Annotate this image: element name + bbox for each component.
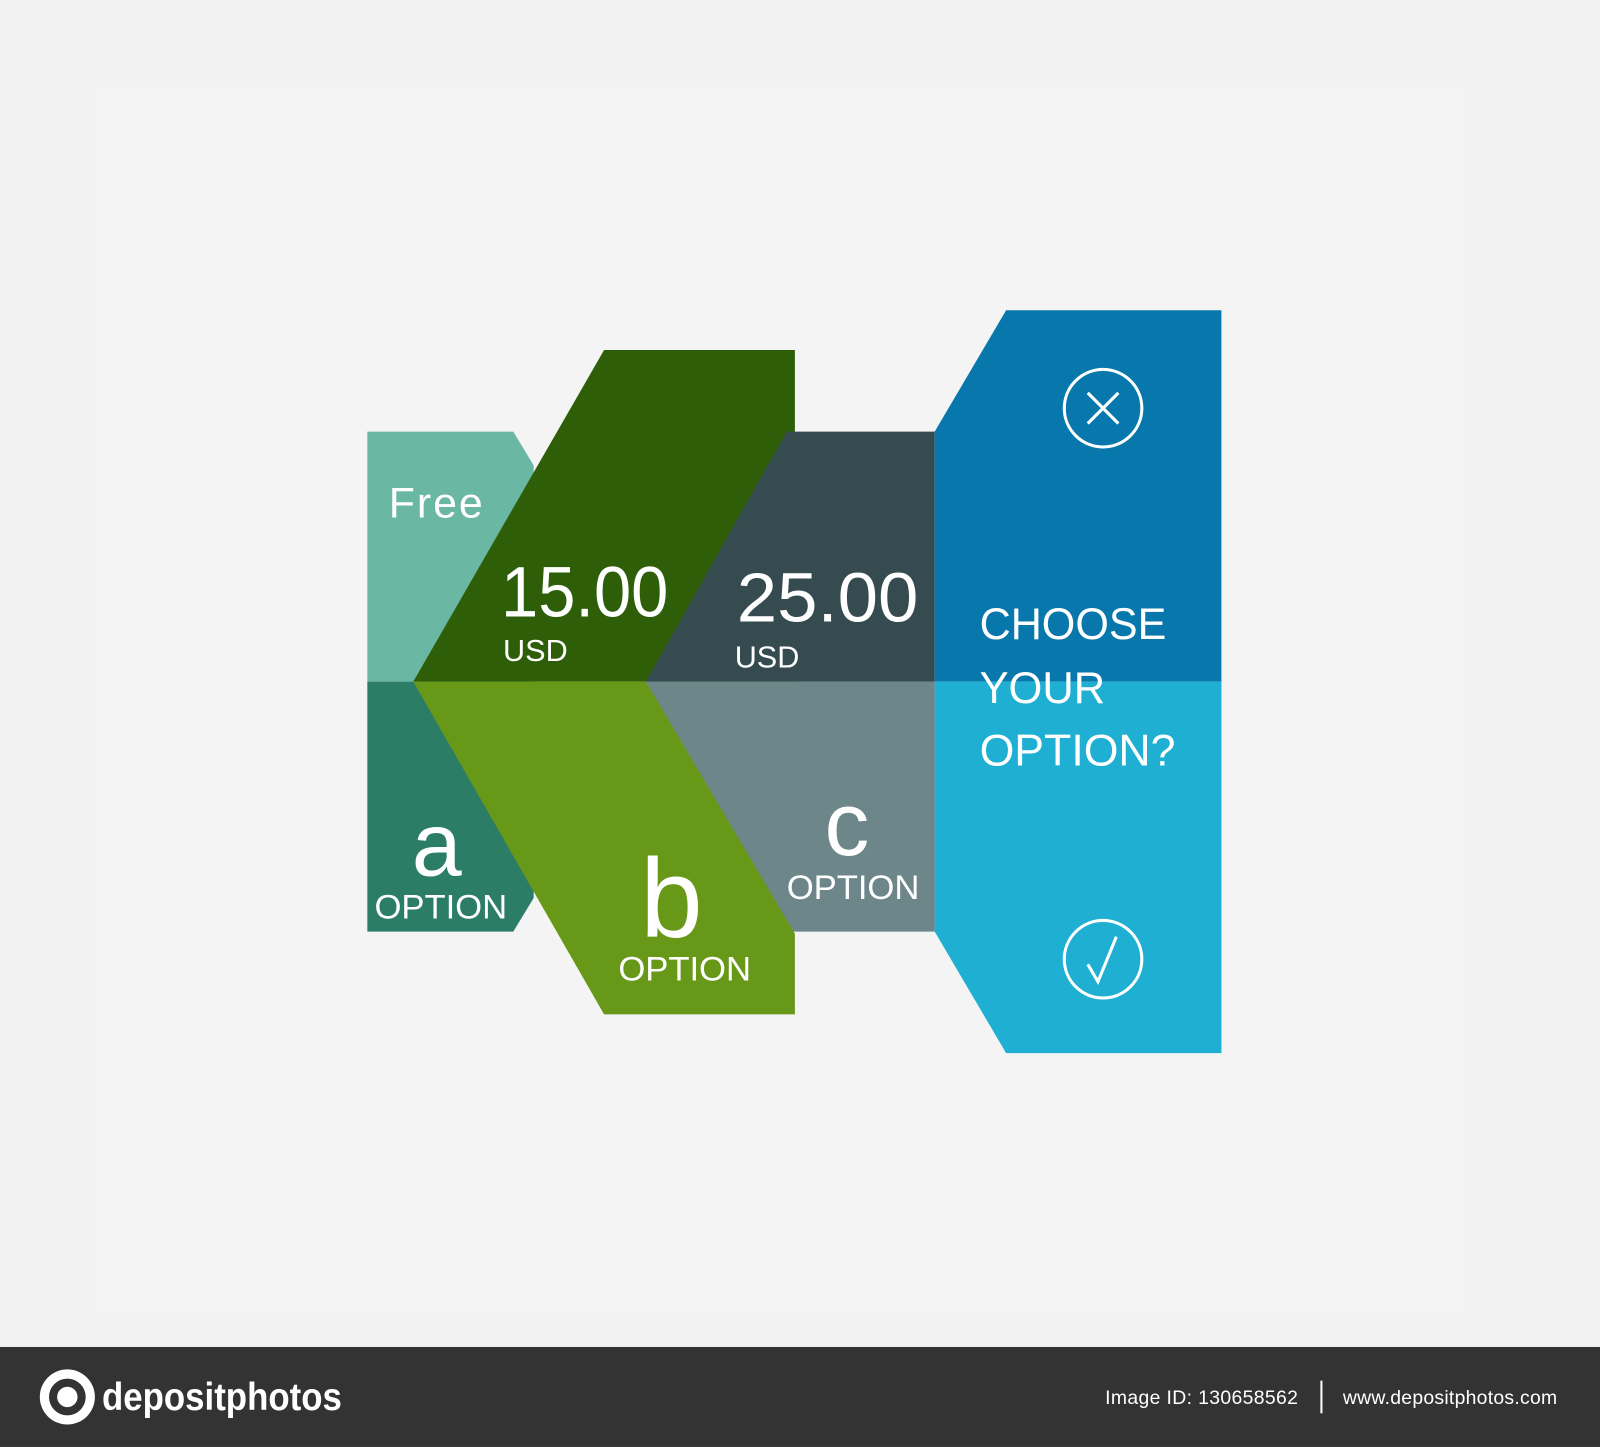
text: USD: USD xyxy=(503,634,568,668)
footer bar xyxy=(0,1347,1600,1447)
text: CHOOSE YOUR OPTION?: YOUR xyxy=(980,662,1105,713)
text: image id: Image ID: 130658562 xyxy=(1105,1387,1298,1409)
text: a: a xyxy=(412,796,462,896)
text: OPTION a: OPTION xyxy=(374,888,507,926)
icon: close circle xyxy=(1064,369,1142,447)
panel: blue top xyxy=(935,310,1221,682)
panel: blue bottom xyxy=(935,682,1221,1053)
panel: free option top xyxy=(367,432,534,682)
text: CHOOSE YOUR OPTION? xyxy=(980,598,1176,775)
text: b: b xyxy=(640,835,703,961)
text: 25.00: 25.00 xyxy=(737,558,918,636)
text: c: c xyxy=(824,775,869,875)
text: depositphotos logo: depositphotos xyxy=(102,1376,342,1419)
icon: check circle xyxy=(1064,920,1142,998)
text: OPTION b: OPTION xyxy=(618,951,751,989)
panel: option b light green xyxy=(413,682,795,1014)
text: website: www.depositphotos.com xyxy=(1342,1387,1557,1409)
panel: option a bottom xyxy=(367,682,534,932)
text: CHOOSE YOUR OPTION?: OPTION? xyxy=(980,724,1176,775)
panel: option c bottom xyxy=(646,682,935,932)
text: 15.00: 15.00 xyxy=(501,552,668,632)
text: OPTION c: OPTION xyxy=(787,869,919,907)
icon: logo camera xyxy=(40,1369,95,1425)
panel: 15.00 dark green xyxy=(413,350,795,682)
panel: 25.00 dark slate xyxy=(646,432,935,682)
text: CHOOSE YOUR OPTION?: CHOOSE xyxy=(980,598,1166,649)
text: USD 2: USD xyxy=(735,640,799,674)
text: Free: Free xyxy=(389,479,483,527)
